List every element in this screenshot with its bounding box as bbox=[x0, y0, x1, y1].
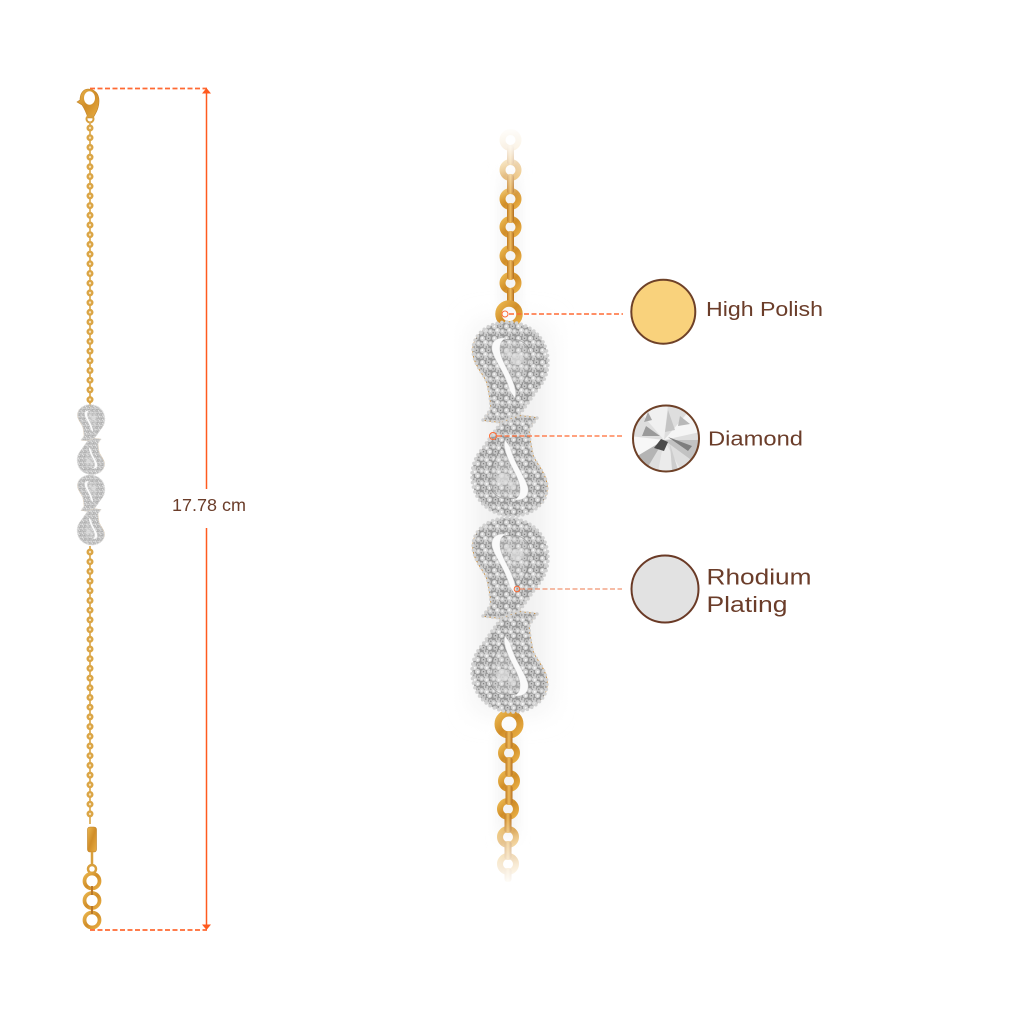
label: High Polish bbox=[706, 298, 823, 321]
extender rings bbox=[84, 852, 100, 928]
leader line bbox=[490, 432, 623, 440]
close-up bracelet bbox=[472, 125, 548, 886]
top chain fade bbox=[490, 125, 532, 200]
swatch: rhodium bbox=[632, 556, 698, 622]
leader line bbox=[514, 586, 622, 592]
diamond motif, miniature bbox=[77, 405, 105, 545]
callout: rhodium plating bbox=[514, 556, 818, 622]
upper jump ring bbox=[498, 304, 520, 324]
soft shadow behind close-up bracelet bbox=[475, 170, 547, 840]
upper chain bbox=[89, 122, 91, 408]
callout: diamond bbox=[490, 405, 803, 472]
dimension label: 17.78 cm bbox=[172, 495, 246, 515]
lower chain bbox=[89, 546, 91, 824]
label: Rhodium bbox=[706, 564, 812, 590]
bottom chain fade bbox=[488, 818, 530, 886]
swatch: polished gold bbox=[631, 280, 695, 344]
lower chain links bbox=[500, 731, 517, 882]
swatch: diamond bbox=[630, 405, 700, 472]
label: Plating bbox=[706, 592, 788, 617]
paisley 2 bbox=[472, 415, 548, 516]
paisley 1 bbox=[472, 322, 548, 423]
leader line bbox=[502, 311, 623, 317]
dimension: length arrow bbox=[90, 88, 211, 930]
upper chain links bbox=[502, 132, 518, 306]
lower jump ring bbox=[498, 713, 520, 735]
label: Diamond bbox=[708, 428, 803, 450]
brand plaque bbox=[88, 827, 96, 852]
lobster clasp bbox=[77, 89, 99, 122]
paisley 4 bbox=[472, 611, 548, 712]
paisley 3 bbox=[472, 518, 548, 619]
callout: high polish bbox=[502, 280, 823, 344]
full-length bracelet bbox=[77, 89, 105, 928]
